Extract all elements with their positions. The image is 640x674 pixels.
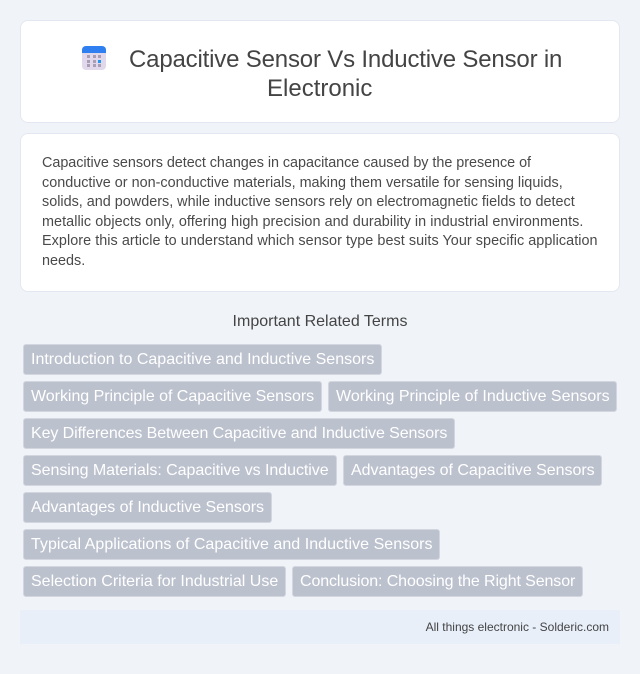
tag: introduction	[23, 344, 382, 375]
panel: description card	[20, 133, 620, 292]
text block: description: needs.	[42, 252, 85, 268]
tag: capacitive advantages: Advantages of Capacitive Sensors	[351, 462, 595, 479]
heading: related terms: Important Related Terms	[233, 313, 407, 330]
text block: description: Explore this article to understand which sensor type best suits Your specific application	[42, 233, 598, 249]
title: Capacitive Sensor Vs Inductive Sensor in	[129, 46, 562, 73]
tag: introduction: Introduction to Capacitive and Inductive Sensors	[31, 351, 374, 368]
title: Electronic	[267, 75, 372, 102]
footer text: All things electronic - Solderic.com	[426, 620, 609, 634]
tag: typical applications: Typical Applications of Capacitive and Inductive Sensors	[31, 536, 433, 553]
tag: inductive advantages	[23, 492, 272, 523]
text block: description: Capacitive sensors detect changes in capacitance caused by the presence of	[42, 155, 531, 171]
text block: description: conductive or non-conductive materials, making them versatile for sensing liquids,	[42, 174, 563, 190]
tag: inductive principle: Working Principle of Inductive Sensors	[336, 388, 610, 405]
tag: key differences	[23, 418, 455, 449]
tag: conclusion	[292, 566, 583, 597]
tag: capacitive advantages	[343, 455, 602, 486]
text block: description	[42, 155, 598, 268]
tag: capacitive principle: Working Principle of Capacitive Sensors	[31, 388, 314, 405]
title	[129, 46, 562, 102]
tag: inductive principle	[328, 381, 617, 412]
tag: selection criteria: Selection Criteria for Industrial Use	[31, 573, 278, 590]
tag: selection criteria	[23, 566, 286, 597]
tag: capacitive principle	[23, 381, 322, 412]
text block: description: solids, and powders, while inductive sensors rely on electromagnetic fields to detect	[42, 194, 575, 210]
tag: typical applications	[23, 529, 440, 560]
tag: sensing materials	[23, 455, 337, 486]
tag: sensing materials: Sensing Materials: Capacitive vs Inductive	[31, 462, 329, 479]
tag: conclusion: Conclusion: Choosing the Right Sensor	[300, 573, 575, 590]
tag: key differences: Key Differences Between Capacitive and Inductive Sensors	[31, 425, 447, 442]
panel: title card	[20, 20, 620, 123]
tag: inductive advantages: Advantages of Inductive Sensors	[31, 499, 264, 516]
text block: description: metallic objects only, offering high precision and durability in industrial environments.	[42, 214, 583, 230]
icon: calendar	[82, 46, 106, 70]
footer	[20, 610, 620, 644]
